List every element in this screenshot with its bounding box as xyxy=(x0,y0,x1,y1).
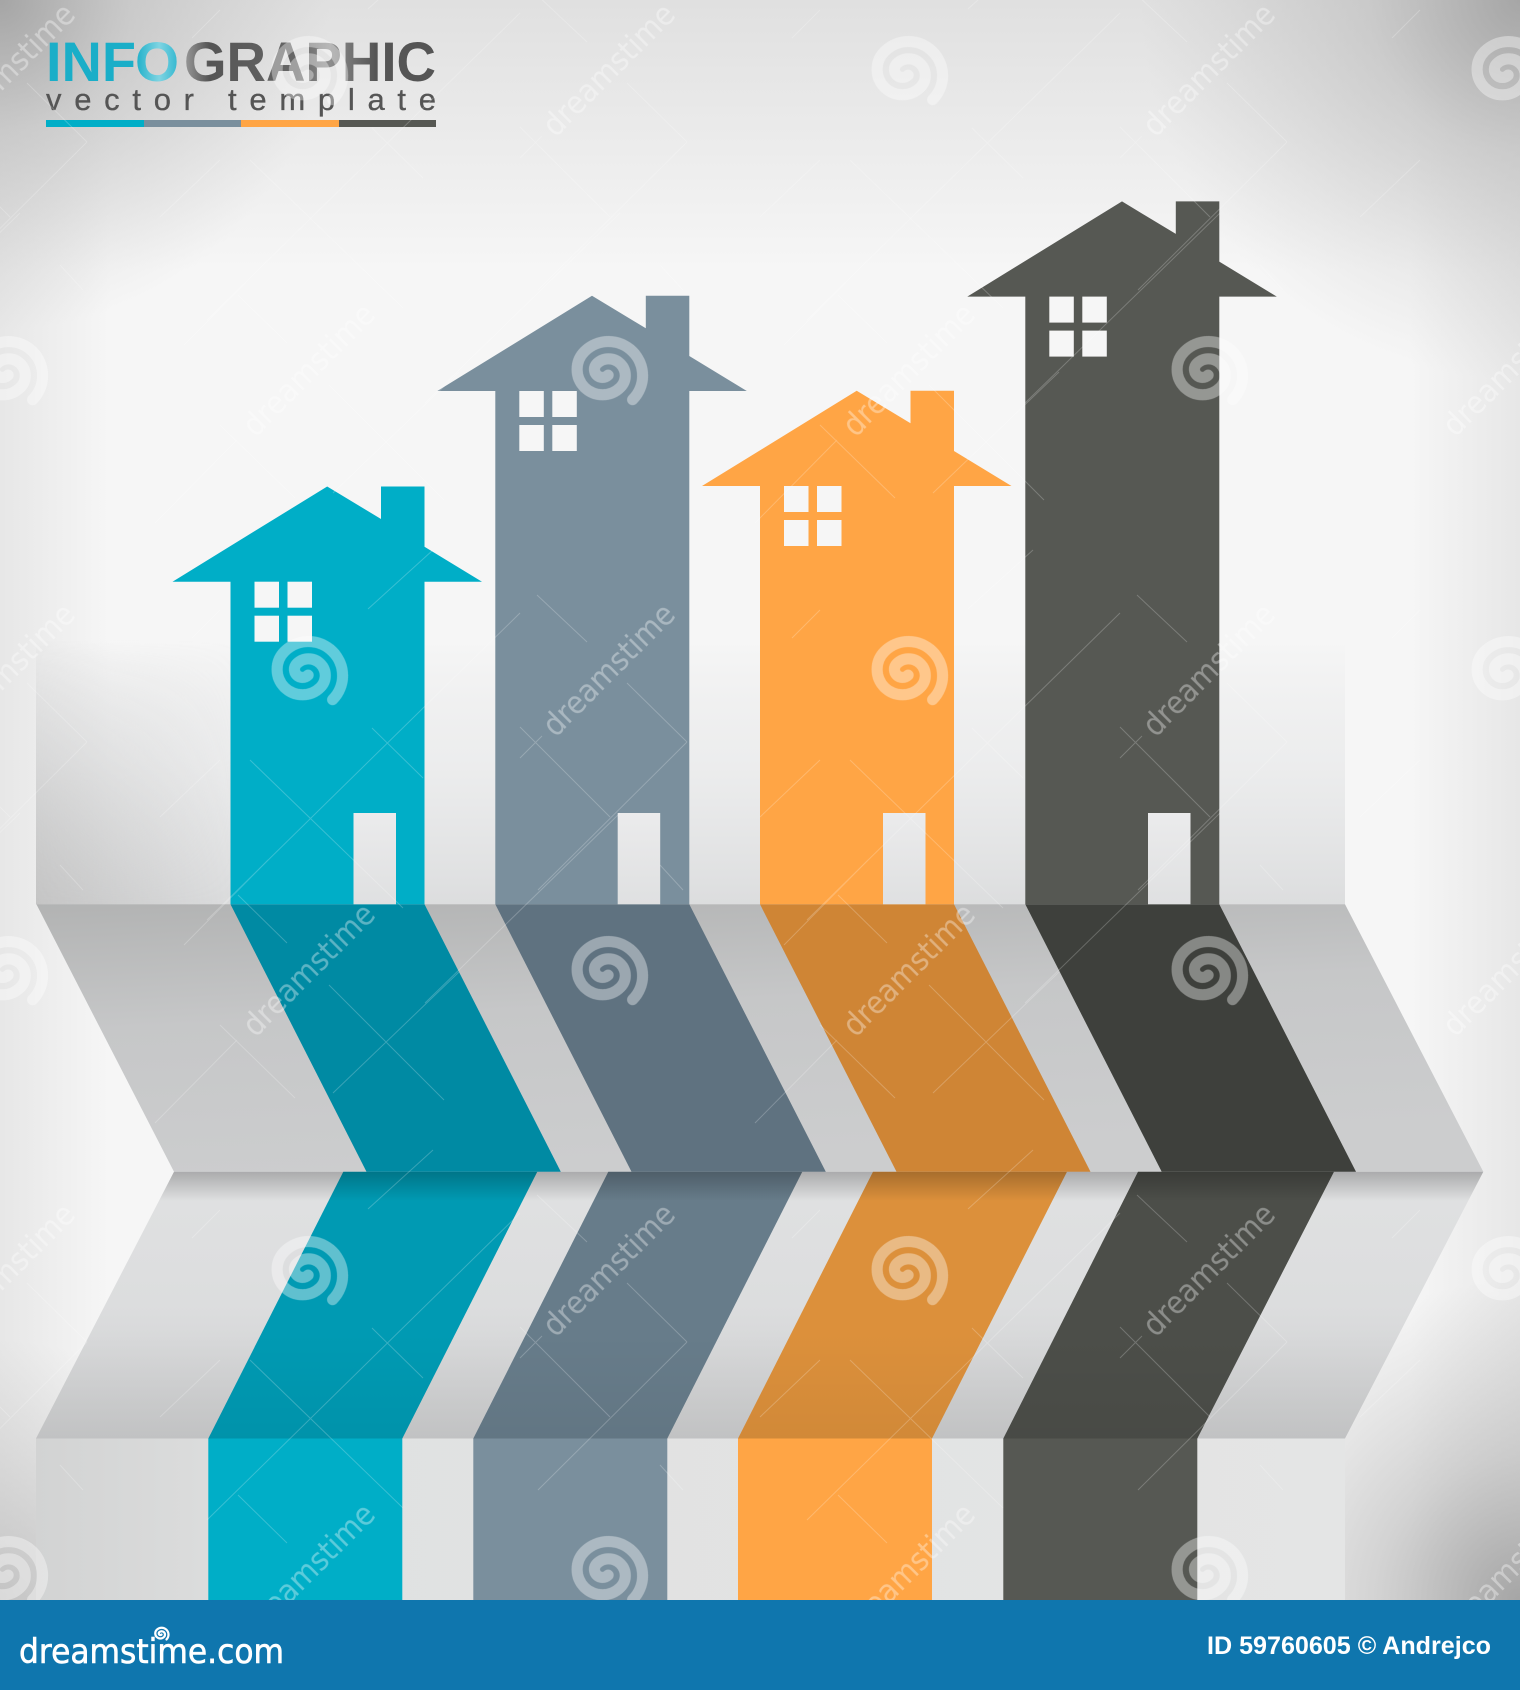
house: teal xyxy=(172,486,482,904)
watermark text: dreamstime xyxy=(835,296,983,444)
footer credit: ID 59760605 © Andrejco xyxy=(1207,1632,1491,1660)
watermark text: dreamstime xyxy=(235,296,383,444)
watermark text: dreamstime xyxy=(235,896,383,1044)
fold shadow xyxy=(36,1172,1483,1438)
title: INFOGRAPHIC: O xyxy=(135,30,179,93)
title: INFOGRAPHIC xyxy=(46,30,436,93)
house: orange xyxy=(702,391,1012,904)
footer bar xyxy=(0,1600,1520,1690)
watermark text: dreamstime xyxy=(535,596,683,744)
title: INFOGRAPHIC: GRAPHIC xyxy=(184,30,436,93)
house: charcoal xyxy=(967,201,1277,904)
band: orange upper xyxy=(760,904,1090,1172)
band: teal upper xyxy=(230,904,561,1172)
band: slate lower xyxy=(473,1172,802,1438)
upper chevron bands xyxy=(230,904,1356,1172)
stripe: slate xyxy=(473,1438,667,1600)
stripe: charcoal xyxy=(1003,1438,1197,1600)
band: charcoal lower xyxy=(1003,1172,1334,1438)
subtitle: vector template: vector template xyxy=(46,82,436,117)
upper grey chevron panel xyxy=(36,904,1483,1172)
watermark text: dreamstime xyxy=(835,896,983,1044)
title logo xyxy=(46,30,436,127)
watermark text: dreamstime xyxy=(535,1196,683,1344)
base grey panel xyxy=(36,1438,1345,1600)
back wall panel xyxy=(36,672,1345,904)
lower grey chevron panel xyxy=(36,1172,1483,1438)
band: charcoal upper xyxy=(1025,904,1356,1172)
base stripes xyxy=(208,1438,1197,1600)
footer logo: dreamstime.com: dreamstime.com xyxy=(19,1632,284,1672)
watermark text: dreamstime xyxy=(235,1496,383,1644)
house: slate xyxy=(437,296,747,904)
band: slate upper xyxy=(495,904,826,1172)
stripe: orange xyxy=(738,1438,932,1600)
stripe: teal xyxy=(208,1438,402,1600)
watermark text: dreamstime xyxy=(835,1496,983,1644)
watermark text: dreamstime xyxy=(1135,1196,1283,1344)
icon: footer spiral xyxy=(153,1625,171,1643)
colour bar xyxy=(46,120,436,127)
band: teal lower xyxy=(208,1172,537,1438)
lower chevron bands xyxy=(208,1172,1334,1438)
title: INFOGRAPHIC: INF xyxy=(46,30,136,93)
watermark text: dreamstime xyxy=(1135,596,1283,744)
band: orange lower xyxy=(738,1172,1067,1438)
